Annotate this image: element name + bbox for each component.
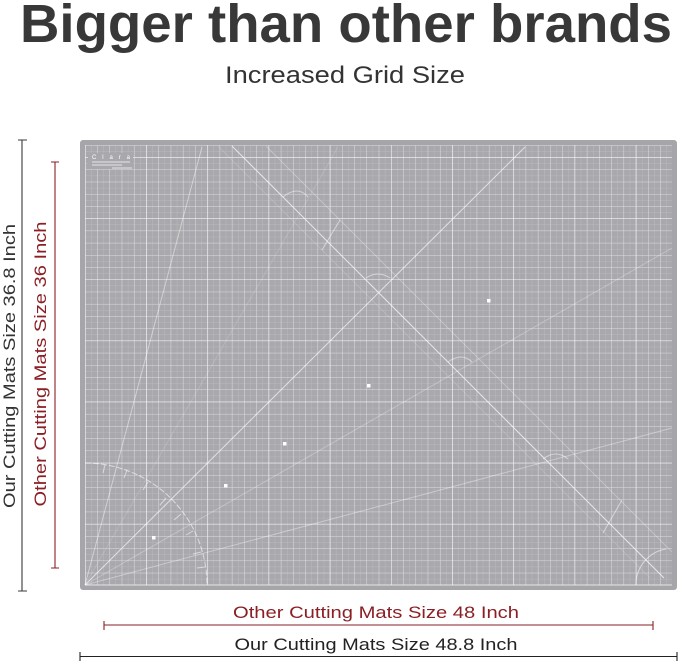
subtitle: Increased Grid Size bbox=[225, 62, 465, 89]
dimension: our mat height: Our Cutting Mats Size 36.8 Inch bbox=[0, 224, 19, 508]
grid bbox=[85, 145, 672, 585]
dimension: other mat height bbox=[31, 162, 59, 568]
brand logo: Clara bbox=[92, 155, 131, 161]
cutting mat bbox=[80, 140, 677, 590]
diagonal ruler lines bbox=[218, 146, 672, 578]
dimension: other mat width: Other Cutting Mats Size 48 Inch bbox=[233, 603, 519, 622]
brand logo bbox=[88, 153, 133, 169]
protractor arc bbox=[85, 463, 666, 585]
dimension: other mat width bbox=[104, 603, 653, 630]
dimension: our mat width bbox=[80, 635, 677, 661]
dimension: other mat height: Other Cutting Mats Size 36 Inch bbox=[31, 222, 50, 506]
angle lines from origin bbox=[85, 147, 672, 585]
dimension: our mat width: Our Cutting Mats Size 48.8 Inch bbox=[234, 635, 518, 654]
small markers bbox=[152, 299, 490, 540]
dimension: our mat height bbox=[0, 140, 27, 591]
